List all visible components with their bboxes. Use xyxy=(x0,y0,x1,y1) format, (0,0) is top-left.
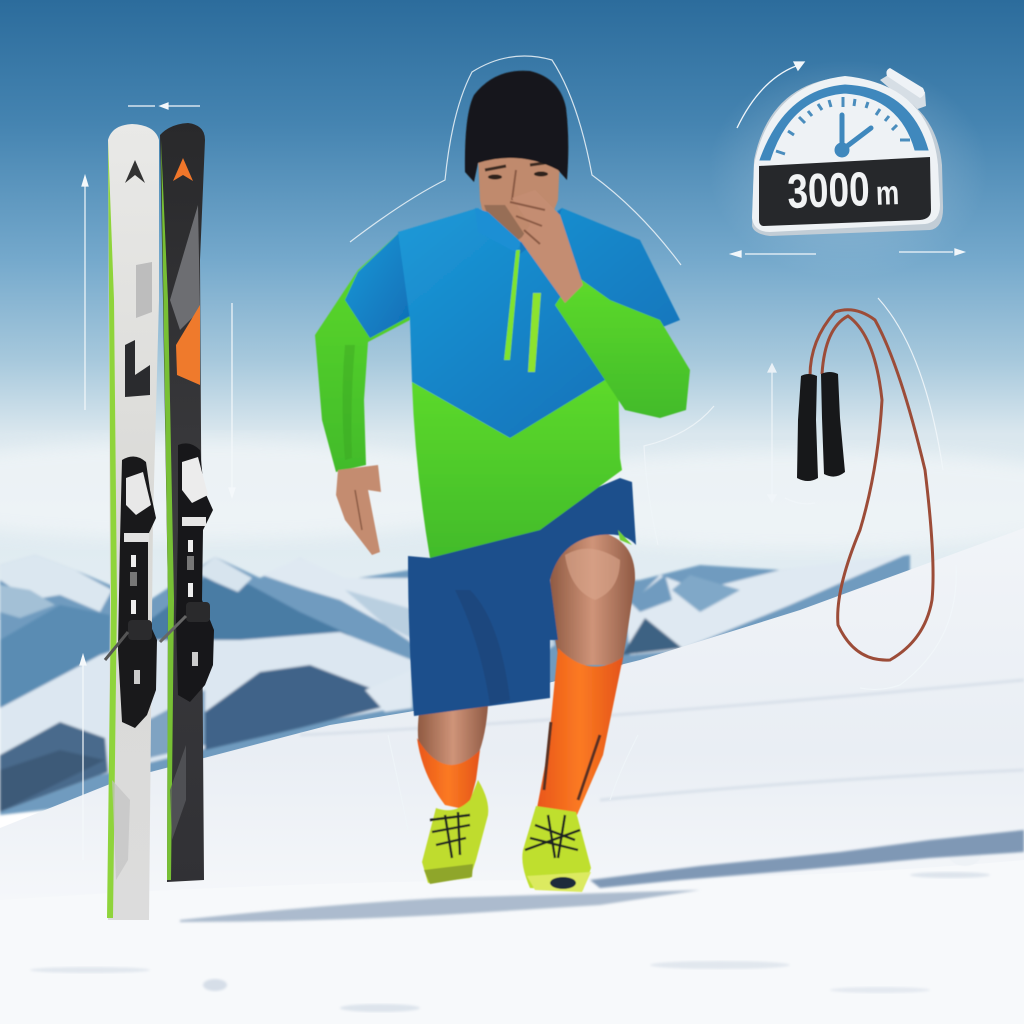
stopwatch glow xyxy=(708,60,988,280)
white ski xyxy=(105,124,159,920)
stopwatch body xyxy=(752,76,943,236)
distance display xyxy=(759,157,931,226)
rope cord xyxy=(810,310,933,660)
dark ski binding xyxy=(160,443,214,702)
raised hand xyxy=(510,190,583,303)
front shoe xyxy=(522,806,591,892)
stopwatch arrows xyxy=(731,62,964,257)
stopwatch crown xyxy=(880,68,926,110)
athlete outline guide curves xyxy=(350,56,714,830)
clock hands xyxy=(837,115,871,155)
head xyxy=(478,155,560,245)
hand lowered xyxy=(336,465,381,555)
rope measurement arrows xyxy=(768,298,956,689)
rope handles xyxy=(797,372,845,481)
stopwatch group xyxy=(708,60,988,280)
front leg xyxy=(550,532,635,665)
distance display: 3000m xyxy=(787,162,900,219)
front sock xyxy=(537,648,623,815)
background: blue sky with haze xyxy=(0,0,1024,620)
dark ski xyxy=(160,123,214,882)
left sleeve (viewer side) xyxy=(315,232,412,472)
background: snowy mountain range xyxy=(0,555,910,815)
jump rope xyxy=(768,298,956,689)
back leg and sock xyxy=(417,705,488,810)
white ski binding xyxy=(105,456,157,728)
right sleeve raised xyxy=(555,275,690,418)
ground shadows of the athlete xyxy=(180,830,1024,922)
background: snow slope xyxy=(0,528,1024,1024)
jersey collar xyxy=(475,208,562,254)
dial ticks xyxy=(776,97,910,154)
black beanie xyxy=(465,71,568,182)
jersey torso xyxy=(398,208,680,558)
back shoe xyxy=(422,780,488,884)
ski measurement arrows xyxy=(80,103,235,860)
shorts xyxy=(408,478,636,716)
athlete xyxy=(315,71,690,892)
